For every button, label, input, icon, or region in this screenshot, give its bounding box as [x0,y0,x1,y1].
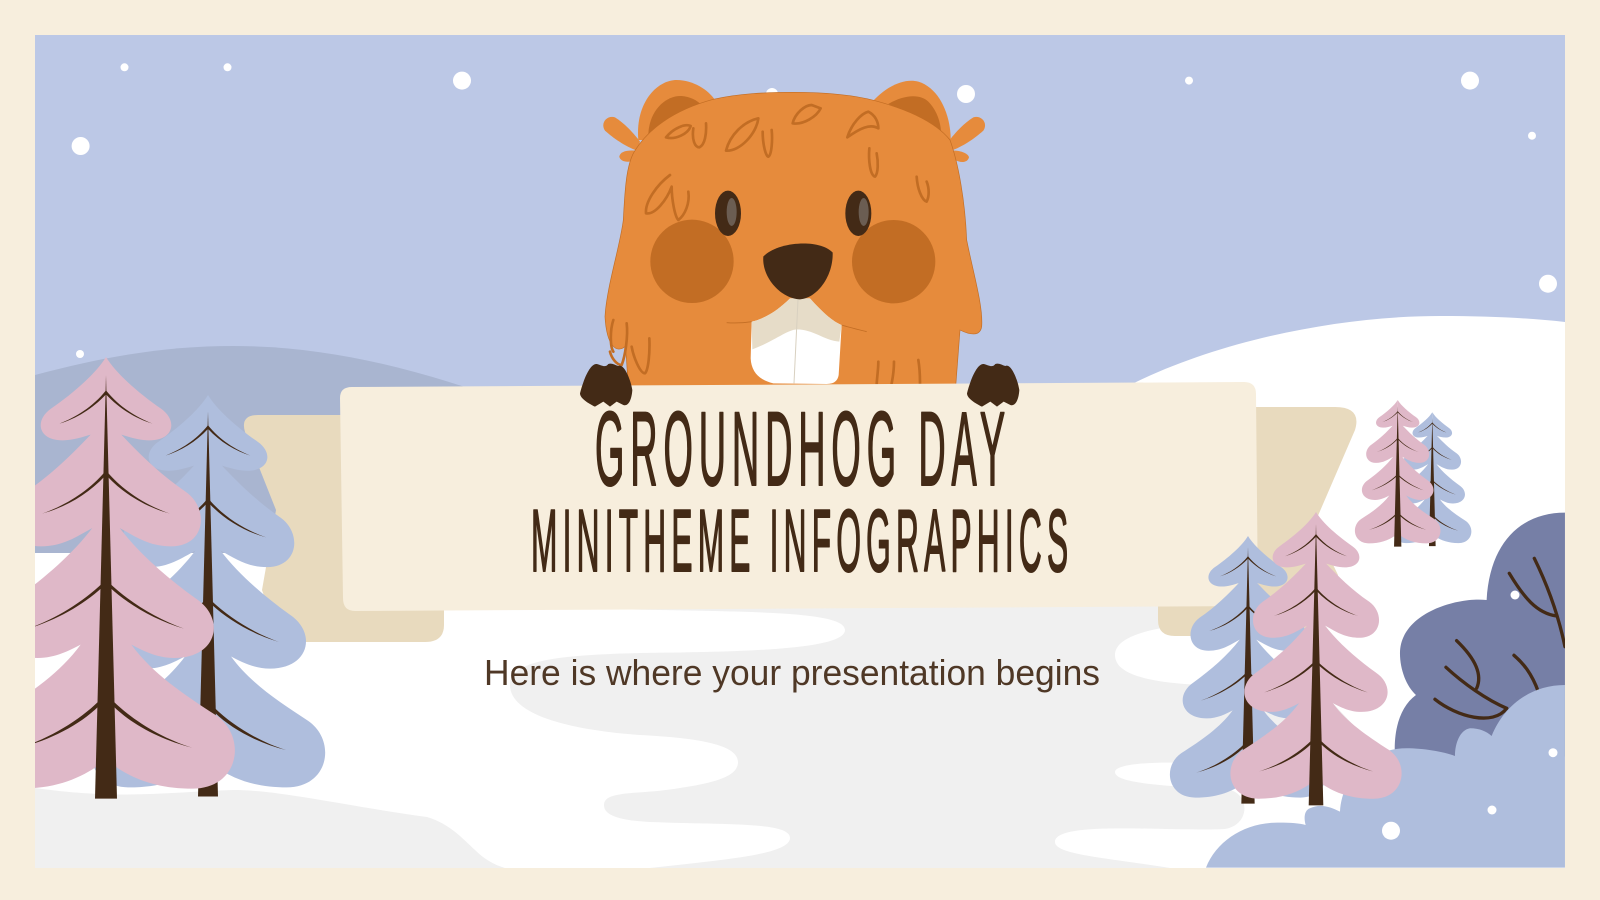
title: GROUNDHOG DAY [595,391,1005,508]
banner tail left [244,415,444,642]
tree: small blue [1393,412,1471,546]
nose [763,243,833,299]
head and body [605,92,982,387]
banner tail right [1158,407,1356,636]
tree group: small distant right [1355,400,1471,547]
tree group: right foreground [1170,512,1402,805]
tree: left pink [0,357,235,799]
patch: bottom left [35,788,505,868]
banner [340,382,1258,611]
bush: light front [1206,685,1565,868]
tree: right blue [1170,536,1326,804]
paw left [580,364,632,407]
bush: dark back [1395,513,1565,757]
snowflakes on bushes [1382,590,1558,840]
teeth [751,298,842,384]
distant hill left [35,346,480,553]
tree: small pink [1355,400,1441,547]
snow shadow patches [35,600,1372,868]
snowy ground [35,316,1565,868]
ears [638,80,951,143]
tufts [603,117,985,162]
cheeks [650,220,935,303]
mouth lines [727,322,867,332]
snowflakes in the sky [72,63,1557,415]
subtitle line: MINITHEME INFOGRAPHICS [531,492,1068,591]
bush branches [1435,558,1565,718]
groundhog [603,80,985,387]
paw right [967,364,1019,407]
eyes [715,191,871,236]
tree group: left [0,357,325,799]
patch: central [440,600,1372,868]
tree: left blue [91,395,325,796]
fur strokes [610,105,929,385]
tree: right pink [1230,512,1402,805]
tagline: Here is where your presentation begins [484,652,1100,693]
